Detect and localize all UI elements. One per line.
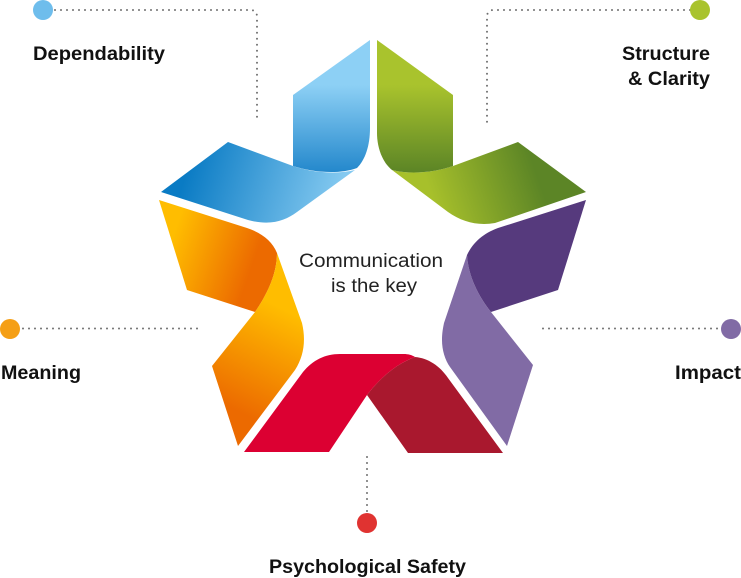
center text <box>299 251 443 297</box>
callout: impact: Impact <box>675 362 741 384</box>
ribbon: dependability (blue) <box>161 40 370 223</box>
callout: meaning: Meaning <box>1 362 81 384</box>
callout: psychological safety: Psychological Safety <box>269 556 466 578</box>
callout: dependability <box>33 0 257 122</box>
star ribbon diagram <box>159 40 586 453</box>
ribbon: impact (purple) <box>442 200 586 446</box>
callout: meaning <box>0 319 198 384</box>
ribbon: psychological safety (red) <box>244 354 503 453</box>
ribbon: structure and clarity (green) <box>377 40 586 224</box>
callout: psychological safety <box>269 457 466 578</box>
callout: structure and clarity: Structure <box>622 43 710 65</box>
callout: impact <box>543 319 741 384</box>
callout: structure and clarity: & Clarity <box>628 68 710 90</box>
center text: is the key <box>331 276 418 297</box>
callout: structure and clarity <box>487 0 710 122</box>
callout: dependability: Dependability <box>33 43 165 65</box>
center text: Communication <box>299 251 443 272</box>
ribbon: meaning (orange) <box>159 200 304 446</box>
